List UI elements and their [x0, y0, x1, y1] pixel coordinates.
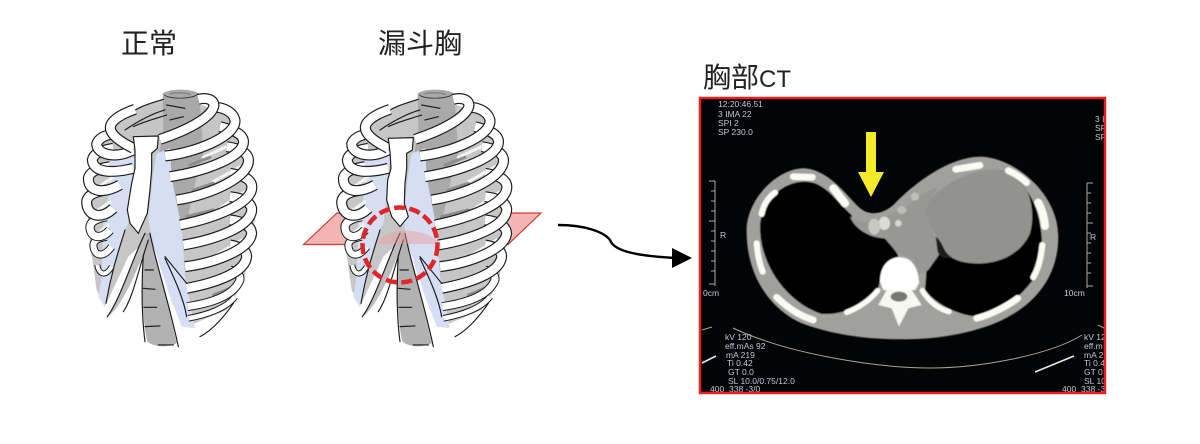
overlay text: scan details: 12:20:46.51: [718, 99, 763, 109]
scale bars: [709, 181, 1093, 288]
overlay text: scan details: mA 2: [1084, 350, 1104, 360]
overlay text: scan details: 400: [1062, 384, 1076, 394]
table arcs: [702, 325, 1104, 372]
rib cross-sections: [757, 165, 1045, 320]
overlay text: scan details: kV 120: [725, 332, 752, 342]
overlay text: scan details: 338 -3/0: [729, 384, 760, 394]
depressed sternum: [387, 138, 413, 227]
CT scan panel: [700, 98, 1106, 394]
overlay text: scan details: GT 0.0: [728, 367, 754, 377]
overlay text: scan details: R: [1090, 232, 1096, 242]
overlay text: scan details: 400: [710, 384, 724, 394]
vertebra: [880, 257, 919, 290]
overlay text: scan details: SPI 2: [718, 118, 739, 128]
overlay text: scan details: SF: [1095, 132, 1106, 142]
overlay text: scan details: SF: [1095, 123, 1106, 133]
overlay text: scan details: kV 12: [1084, 332, 1106, 342]
sternum: [127, 136, 158, 233]
overlay text: scan details: Ti 0.42: [727, 358, 753, 368]
curved arrow: [558, 225, 692, 268]
costal cartilage: [879, 217, 890, 230]
section plane: [304, 213, 541, 244]
overlay text: scan details: 0cm: [703, 288, 719, 298]
overlay text: scan details: SL 10.0/0.75/12.0: [728, 376, 795, 386]
cardiac notch: [936, 237, 952, 258]
CT body cross-section: [747, 157, 1058, 339]
illustration: normal rib cage: [87, 90, 255, 347]
title: normal: 正常: [121, 28, 177, 59]
overlay text: scan details: 3 IMA 22: [718, 109, 752, 119]
illustration: pectus excavatum rib cage: [342, 90, 510, 347]
title: chest CT: 胸部CT: [703, 62, 791, 93]
overlay text: scan details: eff.m: [1084, 341, 1103, 351]
red frame: [700, 98, 1105, 393]
overlay text: scan details: R: [720, 230, 726, 240]
overlay text: scan details: Ti 0.4: [1084, 358, 1105, 368]
plane tint over the chest: [378, 230, 440, 244]
overlay text: scan details: SL 10: [1084, 376, 1106, 386]
title: pectus excavatum: 漏斗胸: [378, 28, 462, 59]
dashed circle highlight: [362, 208, 438, 282]
yellow arrow: [858, 132, 884, 197]
overlay text: scan details: 10cm: [1064, 288, 1085, 298]
overlay text: scan details: 3 I: [1095, 114, 1104, 124]
overlay text: scan details: eff.mAs 92: [725, 341, 766, 351]
overlay text: scan details: [703, 99, 1106, 394]
overlay text: scan details: GT 0: [1084, 367, 1103, 377]
overlay text: scan details: SP 230.0: [718, 127, 753, 137]
overlay text: scan details: mA 219: [726, 350, 755, 360]
overlay text: scan details: 338 -3: [1081, 384, 1105, 394]
